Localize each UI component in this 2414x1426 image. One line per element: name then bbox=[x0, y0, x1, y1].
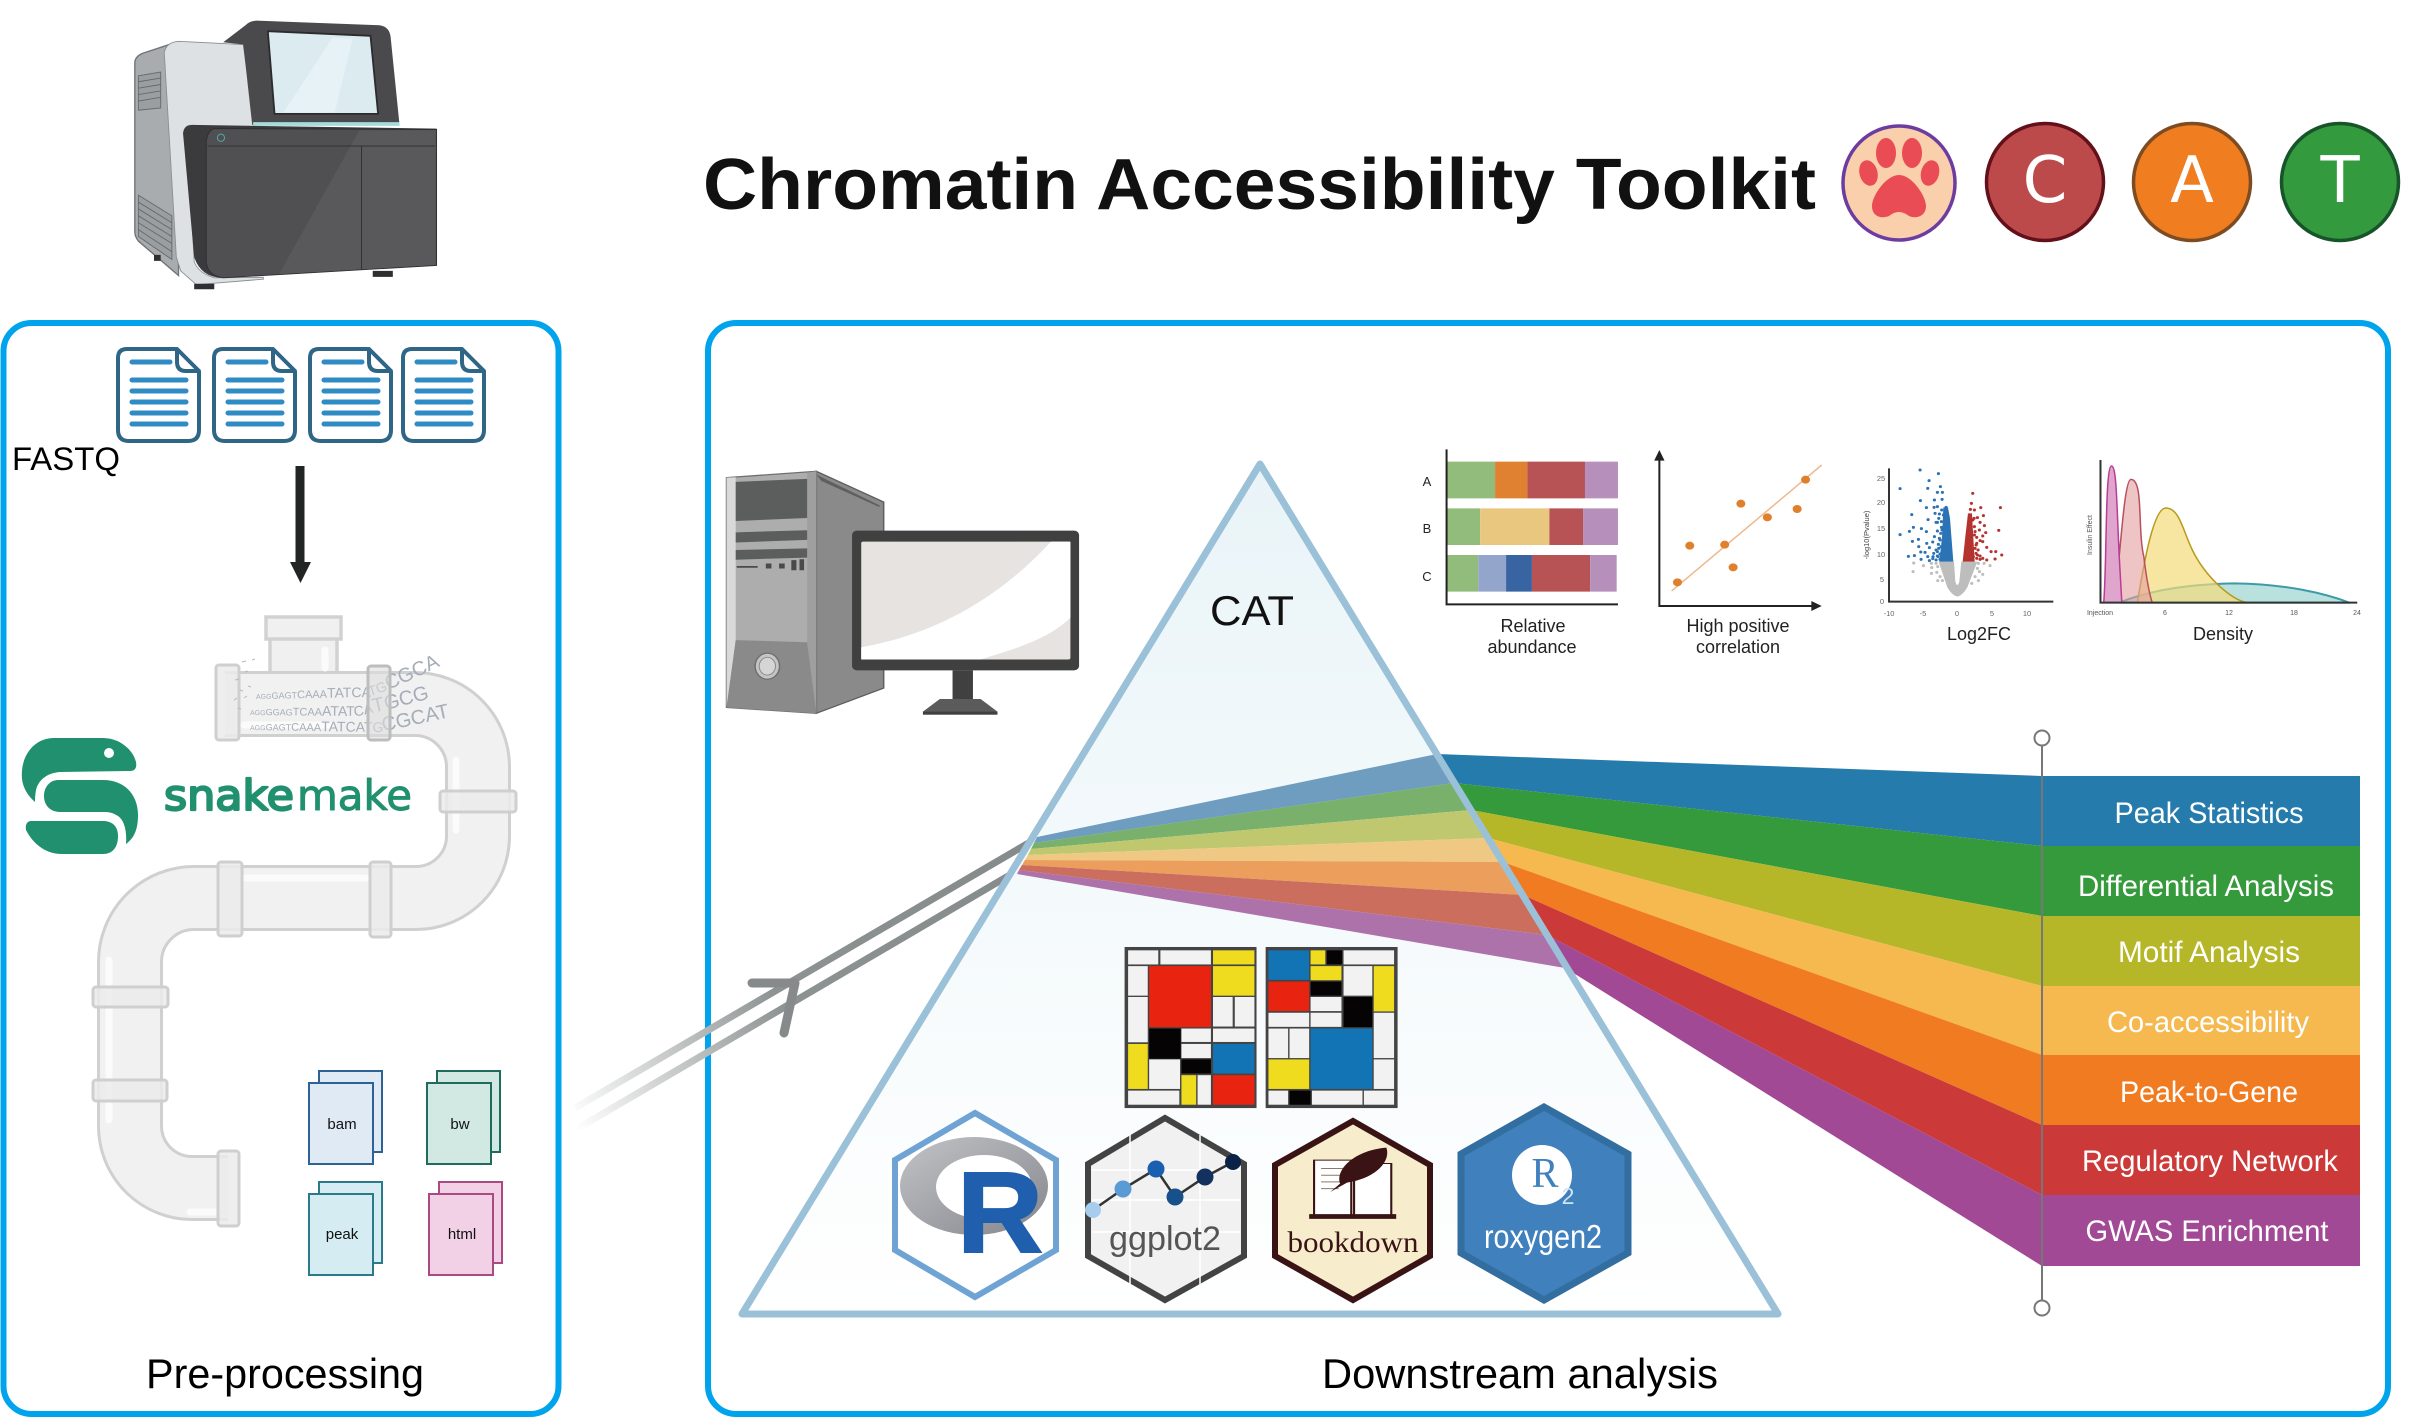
DNA sequence text on pipe: AGGGGAGTCAAATATCATGCG bbox=[250, 686, 428, 716]
chart: volcano plot bbox=[1862, 468, 2053, 644]
snakemake wordmark: snake bbox=[164, 771, 294, 820]
icon: letter A circle bbox=[2134, 124, 2250, 240]
icon: pipeline bbox=[92, 615, 518, 1228]
band: Co-accessibility: Co-accessibility bbox=[2107, 1006, 2309, 1039]
band: Motif Analysis bbox=[1471, 810, 2360, 986]
icon: FASTQ files bbox=[118, 349, 484, 441]
icon: paw logo bbox=[1843, 126, 1955, 240]
chart: density curves: 6 bbox=[2163, 610, 2167, 617]
chart: volcano plot: 15 bbox=[1877, 524, 1885, 533]
output file: bw: bw bbox=[450, 1116, 470, 1133]
chart: relative abundance: B bbox=[1423, 521, 1431, 536]
chart: relative abundance: A bbox=[1423, 474, 1432, 489]
prism fill bbox=[742, 464, 1778, 1314]
chart: correlation scatter bbox=[1654, 450, 1822, 657]
chart: volcano plot: 25 bbox=[1877, 474, 1885, 483]
title: Chromatin Accessibility Toolkit bbox=[703, 145, 1816, 225]
icon: roxygen2 hex bbox=[1461, 1107, 1628, 1300]
icon: letter T circle: T bbox=[2319, 144, 2360, 218]
band: Regulatory Network bbox=[1523, 895, 2360, 1195]
output file: peak: peak bbox=[326, 1226, 359, 1243]
icon: letter C circle: C bbox=[2023, 144, 2067, 218]
icon: mondrian panel right bbox=[1266, 947, 1398, 1108]
chart: volcano plot: 10 bbox=[1877, 550, 1885, 559]
icon: sequencer machine bbox=[135, 21, 437, 289]
snakemake wordmark: make bbox=[297, 771, 412, 820]
icon: bookdown hex bbox=[1275, 1121, 1430, 1300]
incoming light beams bbox=[575, 841, 1032, 1130]
icon: R hex bbox=[895, 1113, 1056, 1297]
icon: R hex: R bbox=[957, 1149, 1043, 1277]
icon: letter T circle bbox=[2282, 124, 2398, 240]
chart: density curves: 24 bbox=[2353, 610, 2361, 617]
FASTQ label: FASTQ bbox=[12, 441, 120, 477]
band: Regulatory Network: Regulatory Network bbox=[2082, 1145, 2339, 1178]
icon: letter C circle bbox=[1986, 124, 2104, 240]
chart: relative abundance bbox=[1422, 449, 1618, 657]
chart: volcano plot: 5 bbox=[1880, 575, 1884, 584]
DNA sequence text on pipe bbox=[234, 656, 447, 732]
DNA sequence text on pipe: AGGGAGTCAAATATCATGCGCAT bbox=[250, 704, 447, 732]
band: GWAS Enrichment: GWAS Enrichment bbox=[2086, 1215, 2329, 1248]
band: Peak Statistics bbox=[1437, 754, 2360, 846]
chart: volcano plot: 10 bbox=[2023, 609, 2031, 618]
band: Peak-to-Gene: Peak-to-Gene bbox=[2120, 1076, 2298, 1109]
output file: html bbox=[429, 1182, 502, 1275]
panel: pre-processing bbox=[0, 320, 562, 1417]
vertical marker line bbox=[2034, 730, 2050, 1316]
chart: volcano plot: -5 bbox=[1920, 609, 1926, 618]
icon: roxygen2 hex: 2 bbox=[1562, 1183, 1574, 1209]
snakemake wordmark bbox=[164, 771, 412, 820]
chart: density curves: Injection bbox=[2087, 610, 2113, 617]
band: Motif Analysis: Motif Analysis bbox=[2118, 936, 2300, 969]
chart: volcano plot: 0 bbox=[1880, 597, 1884, 606]
heading: pre-processing: Pre-processing bbox=[146, 1350, 424, 1397]
icon: snakemake logo bbox=[22, 738, 138, 854]
output file: bam bbox=[309, 1071, 382, 1164]
chart: volcano plot: Log2FC bbox=[1947, 624, 2011, 644]
icon: desktop computer bbox=[727, 471, 1079, 715]
chart: correlation scatter: correlation bbox=[1696, 637, 1780, 657]
panel: downstream analysis bbox=[708, 323, 2388, 1414]
heading: downstream analysis: Downstream analysis bbox=[1322, 1350, 1718, 1397]
chart: relative abundance: C bbox=[1422, 569, 1432, 584]
output file: bam: bam bbox=[327, 1116, 357, 1133]
band: Differential Analysis bbox=[1454, 783, 2360, 916]
chart: correlation scatter: High positive bbox=[1686, 616, 1790, 636]
icon: ggplot2 hex: ggplot2 bbox=[1109, 1220, 1221, 1258]
chart: density curves: 18 bbox=[2290, 610, 2298, 617]
output file: bw bbox=[427, 1071, 500, 1164]
chart: relative abundance: abundance bbox=[1487, 637, 1577, 657]
band: Peak Statistics: Peak Statistics bbox=[2114, 797, 2304, 830]
chart: relative abundance: Relative bbox=[1500, 616, 1566, 636]
icon: ggplot2 hex bbox=[1085, 1118, 1244, 1300]
chart: density curves: Insulin Effect bbox=[2087, 515, 2094, 555]
band: Co-accessibility bbox=[1488, 838, 2360, 1055]
chart: density curves: 12 bbox=[2225, 610, 2233, 617]
spectrum inside prism bbox=[1017, 754, 1565, 968]
icon: bookdown hex: bookdown bbox=[1288, 1226, 1418, 1259]
output file: html: html bbox=[448, 1226, 476, 1243]
chart: volcano plot: 5 bbox=[1990, 609, 1994, 618]
icon: letter A circle: A bbox=[2170, 144, 2214, 218]
icon: roxygen2 hex: roxygen2 bbox=[1484, 1218, 1602, 1255]
chart: volcano plot: -log10(Pvalue) bbox=[1862, 510, 1871, 559]
band: GWAS Enrichment bbox=[1547, 935, 2360, 1266]
band: Differential Analysis: Differential Analysis bbox=[2078, 870, 2334, 903]
pipe coupling over sequence bbox=[368, 666, 390, 740]
chart: volcano plot: 20 bbox=[1877, 498, 1885, 507]
arrow: down to pipeline bbox=[290, 466, 311, 583]
chart: volcano plot: 0 bbox=[1955, 609, 1959, 618]
band: Peak-to-Gene bbox=[1503, 862, 2360, 1125]
prism outline bbox=[742, 464, 1778, 1314]
icon: mondrian panel left bbox=[1125, 947, 1257, 1108]
icon: roxygen2 hex: R bbox=[1532, 1151, 1558, 1197]
CAT label: CAT bbox=[1210, 587, 1294, 634]
chart: density curves bbox=[2087, 460, 2361, 644]
output file: peak bbox=[309, 1182, 382, 1275]
chart: volcano plot: -10 bbox=[1884, 609, 1894, 618]
chart: density curves: Density bbox=[2193, 624, 2253, 644]
